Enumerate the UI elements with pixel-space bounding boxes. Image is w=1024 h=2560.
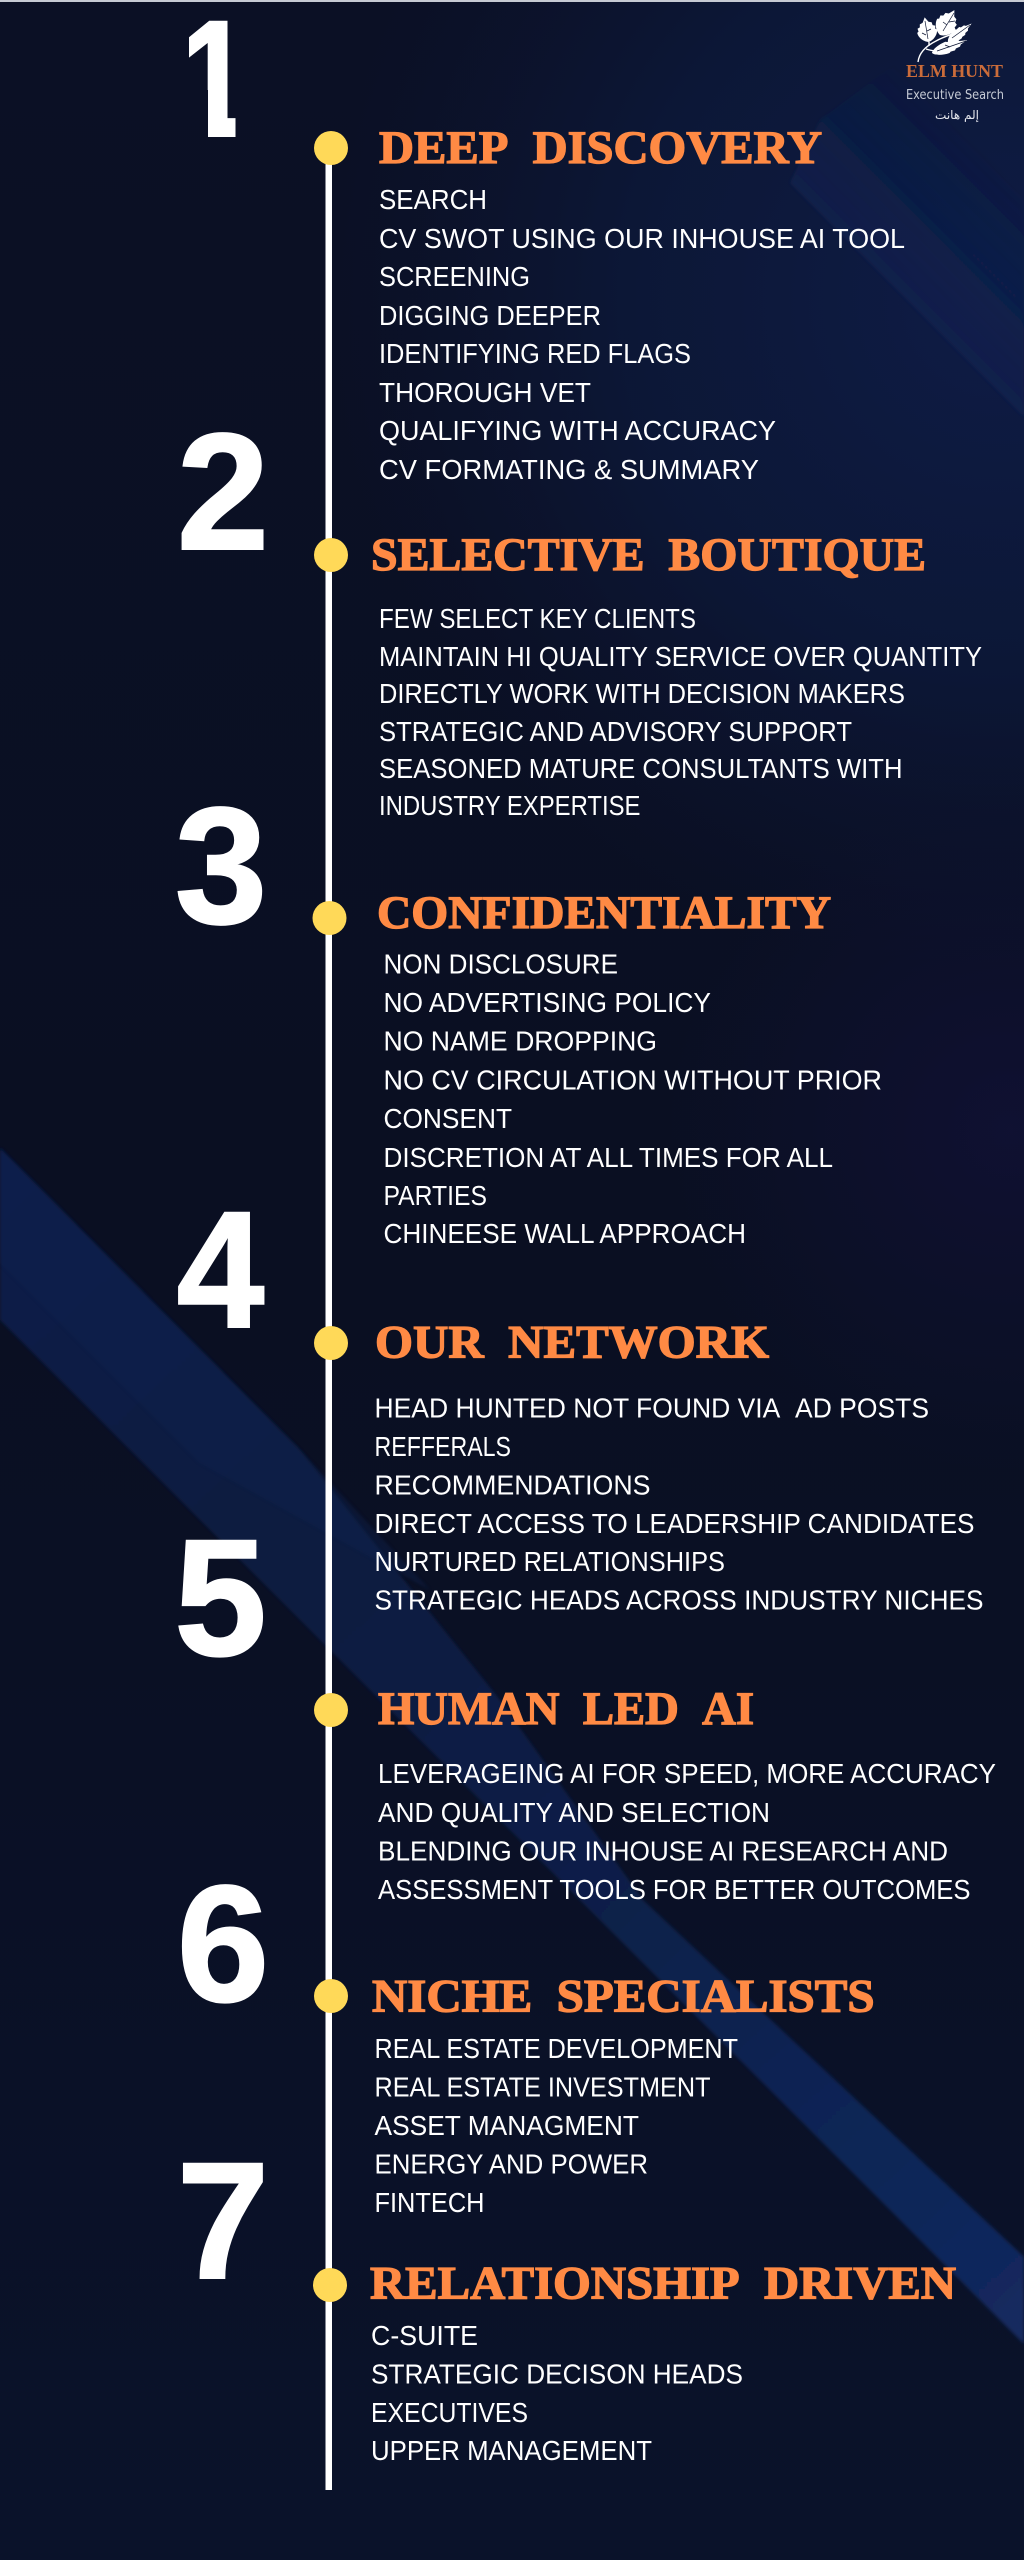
list 4: RECOMMENDATIONS: [374, 1470, 650, 1500]
number 5: 5: [174, 1506, 267, 1691]
list 4: DIRECT ACCESS TO LEADERSHIP CANDIDATES: [374, 1508, 974, 1539]
brand name: ELM HUNT: [906, 61, 1003, 81]
timeline line: [326, 148, 332, 2490]
arabic brand name: إلم هانت: [935, 108, 979, 122]
list 5: LEVERAGEING AI FOR SPEED, MORE ACCURACY: [378, 1758, 996, 1789]
list 3: CHINEESE WALL APPROACH: [384, 1218, 746, 1249]
list 7: STRATEGIC DECISON HEADS: [371, 2358, 743, 2390]
list 3: NO NAME DROPPING: [384, 1026, 657, 1056]
list 2: MAINTAIN HI QUALITY SERVICE OVER QUANTITY: [379, 641, 982, 672]
list 2: [379, 603, 982, 821]
list 1: CV SWOT USING OUR INHOUSE AI TOOL: [379, 223, 905, 254]
list 4: STRATEGIC HEADS ACROSS INDUSTRY NICHES: [374, 1584, 984, 1616]
heading 4: OUR NETWORK: [375, 1316, 769, 1368]
list 3: [384, 948, 882, 1249]
number 7: 7: [177, 2129, 269, 2314]
list 3: NON DISCLOSURE: [384, 948, 618, 980]
dot 7: [313, 2268, 347, 2302]
list 6: [374, 2033, 738, 2218]
step 1: deep discovery: [178, 0, 905, 485]
list 7: UPPER MANAGEMENT: [371, 2435, 652, 2466]
list 7: [371, 2320, 743, 2466]
list 5: BLENDING OUR INHOUSE AI RESEARCH AND: [378, 1836, 948, 1866]
step 6: niche specialists: [177, 1852, 874, 2218]
list 1: THOROUGH VET: [379, 377, 591, 408]
list 4: HEAD HUNTED NOT FOUND VIA AD POSTS: [374, 1392, 929, 1424]
heading 7: RELATIONSHIP DRIVEN: [370, 2258, 956, 2310]
dot 4: [314, 1326, 348, 1360]
dot 6: [314, 1979, 348, 2013]
list 3: DISCRETION AT ALL TIMES FOR ALL: [384, 1142, 833, 1173]
list 1: IDENTIFYING RED FLAGS: [379, 338, 691, 369]
list 1: DIGGING DEEPER: [379, 300, 601, 331]
dot 1: [314, 131, 348, 165]
list 6: ENERGY AND POWER: [374, 2148, 648, 2180]
step 7: relationship driven: [177, 2129, 956, 2466]
icon: elm leaves: [915, 5, 975, 62]
list 6: ASSET MANAGMENT: [374, 2110, 639, 2141]
list 1: SCREENING: [379, 261, 530, 292]
list 5: [378, 1758, 996, 1905]
step 2: selective boutique: [177, 400, 982, 821]
list 3: NO CV CIRCULATION WITHOUT PRIOR: [384, 1064, 882, 1096]
list 4: [374, 1392, 984, 1616]
list 1: CV FORMATING & SUMMARY: [379, 454, 759, 485]
list 4: NURTURED RELATIONSHIPS: [374, 1546, 725, 1577]
number 6: 6: [177, 1852, 269, 2037]
number 3: 3: [175, 774, 267, 959]
list 3: NO ADVERTISING POLICY: [384, 987, 711, 1018]
list 2: FEW SELECT KEY CLIENTS: [379, 603, 696, 634]
list 3: CONSENT: [384, 1103, 512, 1134]
tagline: Executive Search: [906, 87, 1004, 103]
list 2: STRATEGIC AND ADVISORY SUPPORT: [379, 716, 852, 747]
list 7: EXECUTIVES: [371, 2397, 528, 2428]
list 5: ASSESSMENT TOOLS FOR BETTER OUTCOMES: [378, 1874, 970, 1905]
list 7: C-SUITE: [371, 2320, 478, 2351]
list 6: REAL ESTATE INVESTMENT: [374, 2072, 711, 2102]
list 2: SEASONED MATURE CONSULTANTS WITH: [379, 753, 902, 784]
list 1: SEARCH: [379, 184, 487, 215]
list 6: REAL ESTATE DEVELOPMENT: [374, 2033, 738, 2064]
heading 1: DEEP DISCOVERY: [379, 122, 822, 174]
number 2: 2: [177, 400, 269, 585]
dot 2: [314, 538, 348, 572]
number 4: 4: [177, 1177, 264, 1363]
list 4: REFFERALS: [374, 1431, 511, 1462]
step 3: confidentiality: [175, 774, 882, 1249]
heading 2: SELECTIVE BOUTIQUE: [371, 529, 926, 581]
list 3: PARTIES: [384, 1180, 487, 1211]
heading 5: HUMAN LED AI: [378, 1683, 754, 1735]
heading 6: NICHE SPECIALISTS: [372, 1970, 874, 2022]
step 5: human led ai: [174, 1506, 996, 1905]
dot 5: [314, 1693, 348, 1727]
heading 3: CONFIDENTIALITY: [377, 887, 831, 939]
list 6: FINTECH: [374, 2187, 484, 2218]
dot 3: [312, 901, 346, 935]
logo: [906, 5, 1004, 122]
list 2: INDUSTRY EXPERTISE: [379, 790, 640, 821]
step 4: our network: [177, 1177, 983, 1616]
list 1: [379, 184, 905, 485]
list 5: AND QUALITY AND SELECTION: [378, 1797, 770, 1828]
list 1: QUALIFYING WITH ACCURACY: [379, 415, 776, 446]
list 2: DIRECTLY WORK WITH DECISION MAKERS: [379, 678, 905, 709]
